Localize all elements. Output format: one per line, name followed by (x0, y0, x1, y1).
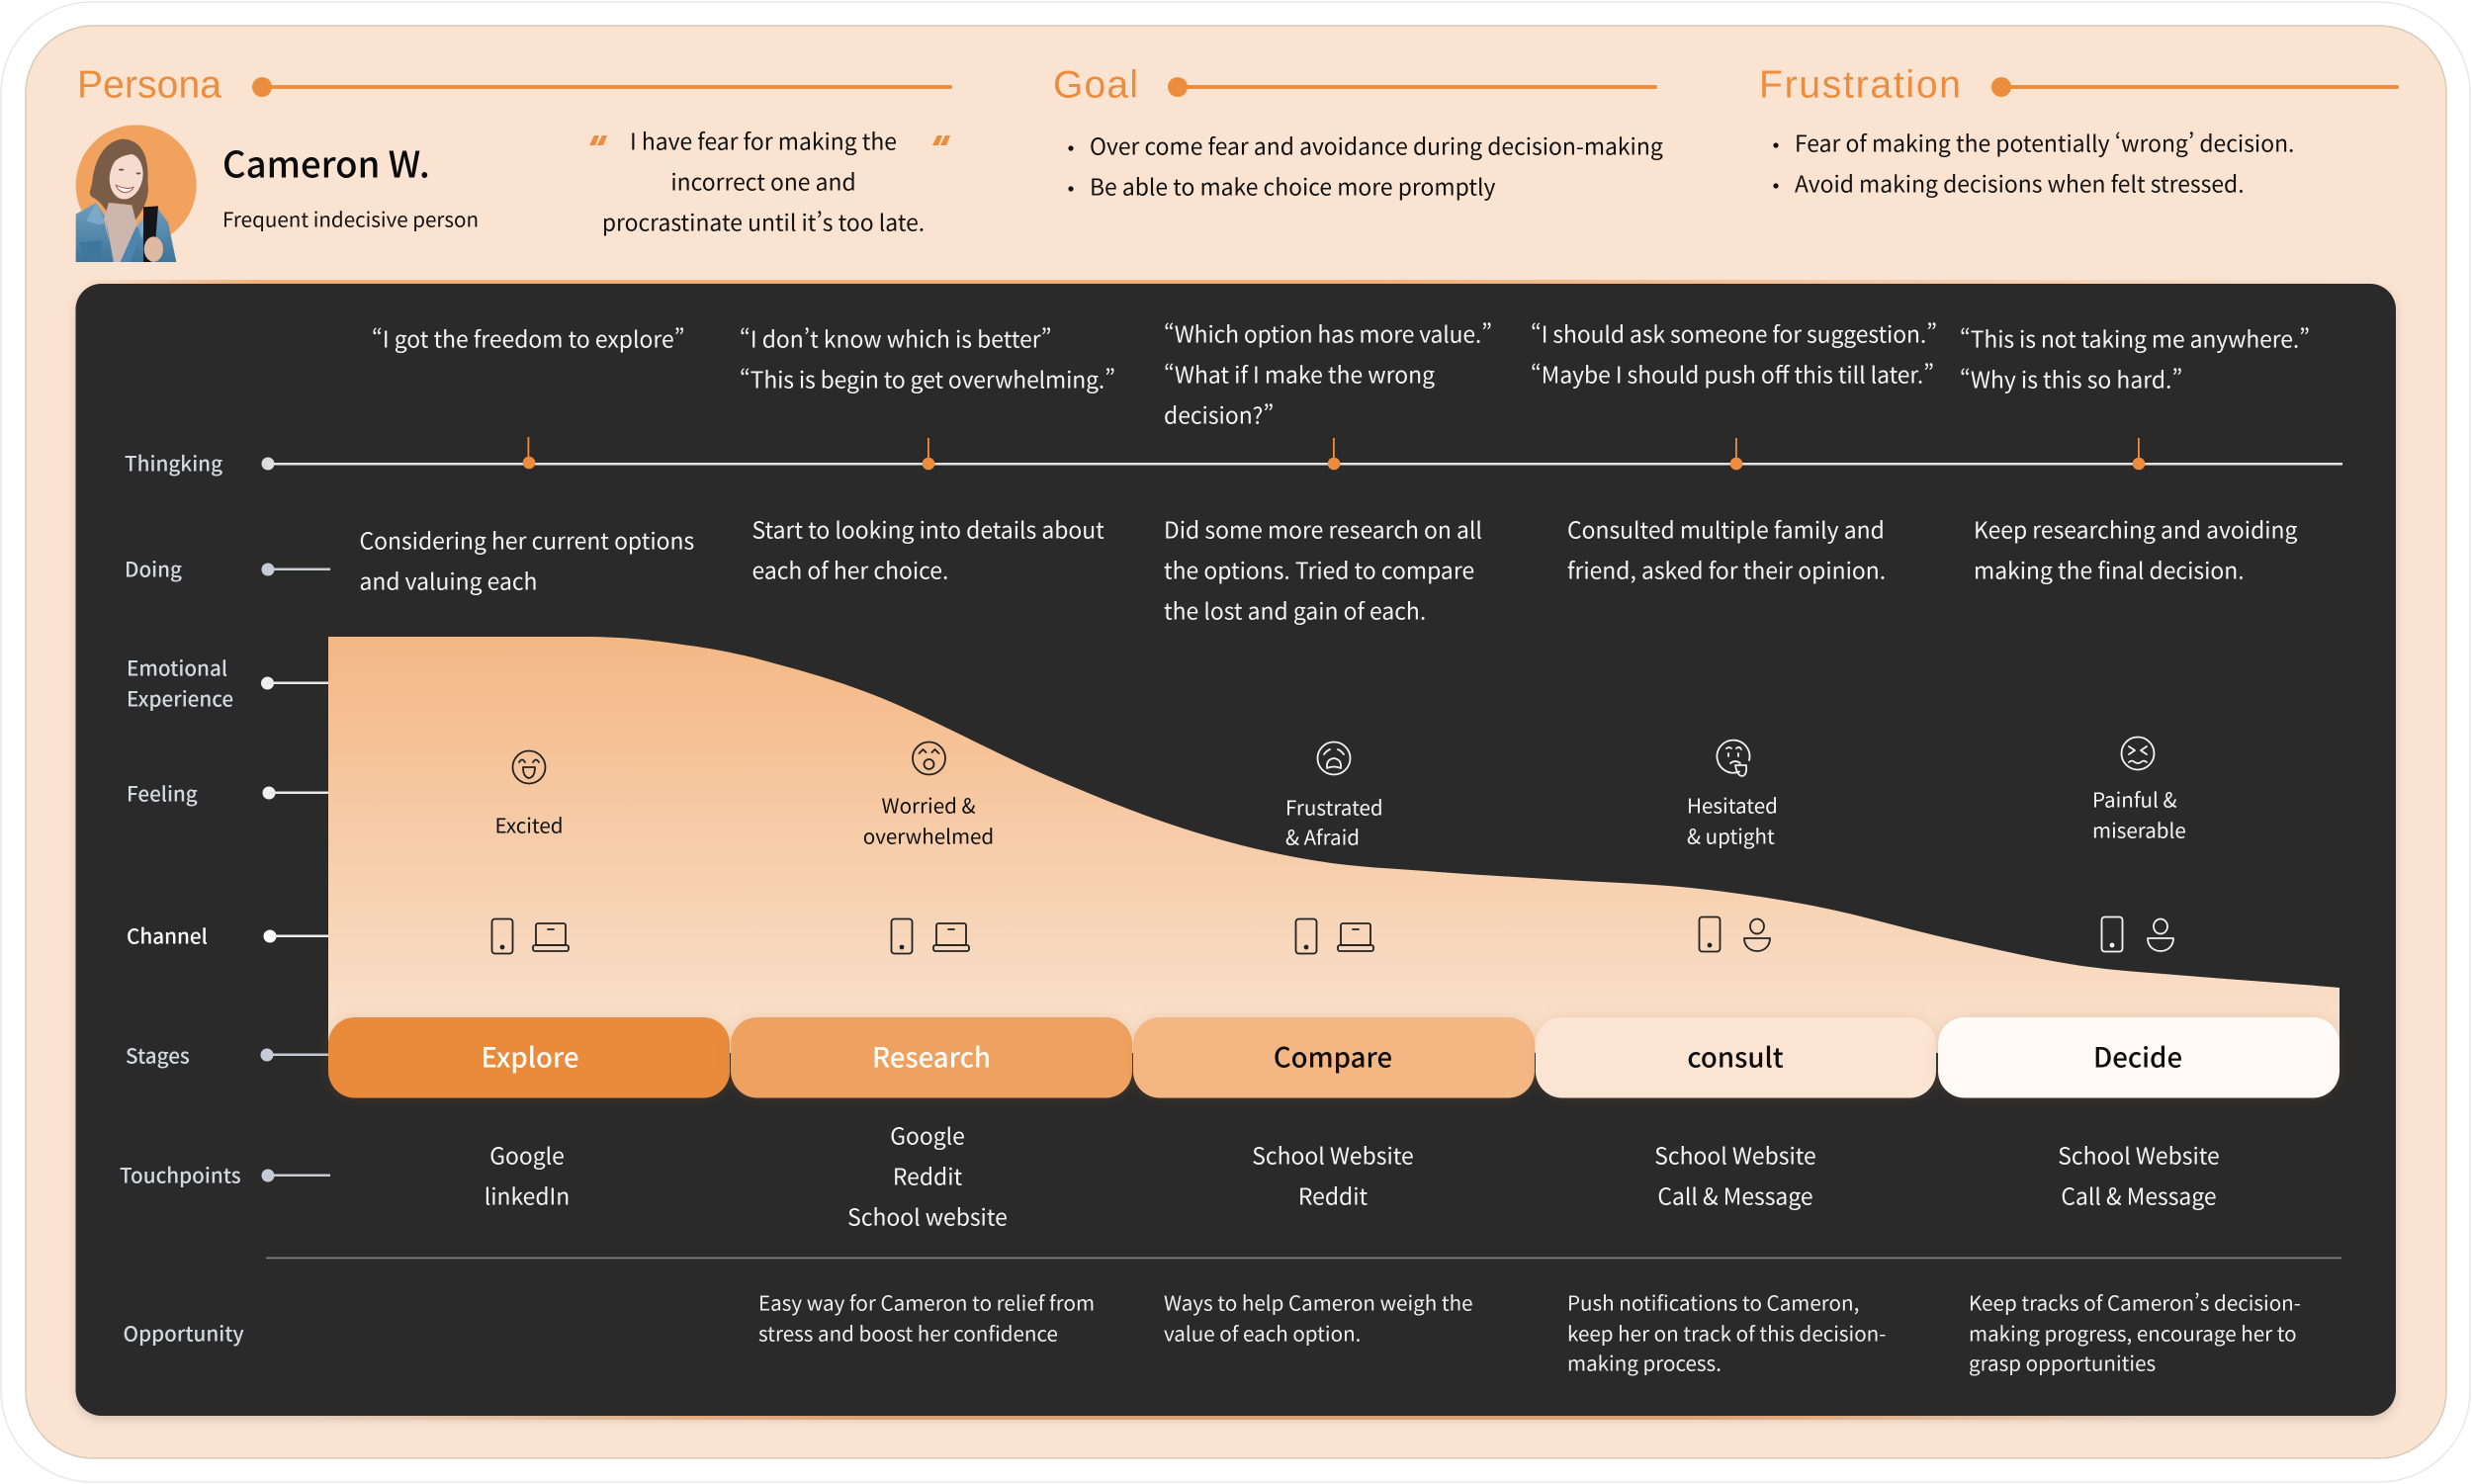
opportunity: stage 2: Easy way for Cameron to relief from (758, 1286, 1095, 1316)
doing: stage 3 (1164, 511, 1482, 626)
label: Channel (127, 919, 329, 949)
feeling: painful: Painful & (2092, 783, 2177, 813)
row labels (120, 447, 330, 1347)
icon: phone (1699, 917, 1721, 951)
heading: Goal: Goal (1053, 63, 1138, 106)
label: Touchpoints (120, 1159, 330, 1188)
opportunity: stage 2: stress and boost her confidence (758, 1317, 1058, 1347)
stage: Explore (328, 1017, 730, 1097)
touchpoints: stage 5 (2058, 1137, 2220, 1211)
quote: persona statement: procrastinate until it’s too late. (602, 204, 925, 237)
doing: stage 1: Considering her current options (360, 522, 694, 556)
doing: stage 4 (1567, 511, 1886, 585)
name: Cameron W.: Cameron W. (222, 135, 430, 188)
icon: opening quote mark (589, 135, 607, 145)
stages bar (328, 1017, 2340, 1097)
touchpoints: stage 4: School Website (1654, 1137, 1816, 1171)
emotional curve (328, 637, 2340, 1053)
opportunity: stage 4 (1567, 1286, 1886, 1376)
quote: stage 2 (740, 320, 1115, 394)
quote: stage 2: “I don’t know which is better” (740, 320, 1052, 354)
channel: stage 2 icons (892, 919, 969, 953)
goal list: Be able to make choice more promptly (1090, 168, 1496, 202)
feeling: frustrated: Frustrated (1285, 791, 1383, 821)
touchpoints: stage 5: School Website (2058, 1137, 2220, 1171)
feeling: frustrated: & Afraid (1285, 821, 1360, 850)
frustration list: Avoid making decisions when felt stressed. (1795, 165, 2245, 199)
label: Emotional Experience: Emotional (127, 652, 227, 681)
doing: stage 2 (751, 511, 1104, 585)
heading rule: Persona (252, 77, 952, 97)
label: Doing: Doing (125, 553, 182, 582)
doing: stage 1: and valuing each (360, 563, 537, 596)
feeling: hesitated: & uptight (1687, 820, 1775, 849)
feeling: painful (2092, 738, 2186, 843)
opportunity: stage 4: keep her on track of this decision- (1567, 1317, 1886, 1347)
label: Touchpoints: Touchpoints (120, 1159, 241, 1188)
quote: stage 4: “I should ask someone for suggestion.” (1531, 315, 1937, 349)
stage: Decide (1938, 1017, 2340, 1097)
stage: Decide: Decide (2093, 1035, 2182, 1075)
opportunity: stage 5 (1969, 1286, 2301, 1376)
quote: persona statement (589, 123, 950, 237)
touchpoints: stage 5: Call & Message (2061, 1178, 2217, 1211)
heading: Persona: Persona (77, 63, 221, 106)
icon: phone (892, 919, 912, 953)
feeling: excited (494, 751, 564, 838)
icon: closing quote mark (932, 135, 950, 145)
label: Thingking: Thingking (125, 447, 222, 477)
touchpoints: stage 2 (847, 1117, 1008, 1232)
doing: stage 5: Keep researching and avoiding (1974, 511, 2298, 545)
icon: person (2148, 919, 2173, 951)
quote: stage 3: “Which option has more value.” (1164, 315, 1492, 349)
label: Feeling (127, 777, 329, 807)
touchpoints: stage 3: School Website (1252, 1137, 1414, 1171)
opportunity: stage 5: Keep tracks of Cameron’s decision- (1969, 1286, 2301, 1316)
frustration list (1773, 125, 2294, 199)
opportunity: stage 4: Push notifications to Cameron, (1567, 1286, 1859, 1316)
touchpoints: stage 2: School website (847, 1198, 1008, 1232)
icon: laptop (533, 923, 569, 951)
icon: phone (2102, 917, 2122, 951)
icon: laptop (1338, 923, 1373, 951)
feeling: excited: Excited (494, 809, 564, 838)
label: Opportunity: Opportunity (123, 1317, 244, 1347)
stage: Compare: Compare (1274, 1035, 1392, 1075)
quote: persona statement: I have fear for making the (630, 123, 897, 156)
touchpoints: stage 3 (1252, 1137, 1414, 1211)
touchpoints: stage 1: linkedIn (485, 1178, 570, 1211)
heading rule: Goal (1168, 77, 1657, 97)
opportunity: stage 5: grasp opportunities (1969, 1347, 2156, 1376)
touchpoints: stage 2: Reddit (893, 1158, 963, 1191)
icon: painful face (2122, 738, 2154, 769)
panel: persona (76, 63, 952, 262)
quote: stage 5: “This is not taking me anywhere.” (1960, 320, 2310, 354)
label: Stages (126, 1039, 329, 1069)
panel: frustration (1759, 63, 2399, 199)
channel: stage 4 icons (1699, 917, 1770, 951)
feeling: hesitated: Hesitated (1687, 789, 1778, 819)
label: Channel: Channel (127, 919, 208, 949)
doing: stage 5: making the final decision. (1974, 552, 2245, 585)
touchpoints: stage 3: Reddit (1298, 1178, 1368, 1211)
doing: stage 2: each of her choice. (751, 552, 948, 585)
stage: consult (1536, 1017, 1936, 1097)
doing: stage 1 (360, 522, 694, 596)
opportunity: stage 3 (1164, 1286, 1473, 1347)
goal list (1068, 128, 1663, 202)
label: Thingking (125, 447, 275, 477)
quote: stage 3 (1164, 315, 1492, 430)
label: Stages: Stages (126, 1039, 190, 1069)
touchpoints: stage 2: Google (890, 1117, 965, 1151)
doing: stage 4: friend, asked for their opinion. (1567, 552, 1886, 585)
icon: excited face (512, 751, 546, 783)
quote: stage 3: decision?” (1164, 396, 1274, 430)
stage: Research (731, 1017, 1132, 1097)
icon: hesitated face (1717, 741, 1749, 776)
feeling: worried: Worried & (882, 789, 975, 819)
opportunity: stage 5: making progress, encourage her to (1969, 1317, 2297, 1347)
heading: Frustration: Frustration (1759, 63, 1961, 106)
quote: stage 3: “What if I make the wrong (1164, 356, 1435, 390)
doing: stage 3: Did some more research on all (1164, 511, 1482, 545)
touchpoints: stage 4 (1654, 1137, 1816, 1211)
label: Emotional Experience: Experience (127, 682, 233, 712)
doing descriptions (360, 511, 2298, 626)
quote: stage 1: “I got the freedom to explore” (372, 320, 685, 354)
icon: person (1744, 919, 1770, 951)
opportunity: stage 2 (758, 1286, 1095, 1347)
channel: stage 5 icons (2102, 917, 2173, 951)
icon: phone (1295, 919, 1317, 953)
icon: phone (492, 919, 512, 953)
touchpoints: stage 1 (485, 1137, 570, 1211)
icon: worried face (913, 742, 945, 775)
quote: stage 5 (1960, 320, 2310, 394)
opportunity: stage 3: Ways to help Cameron weigh the (1164, 1286, 1473, 1316)
panel: journey map (75, 284, 2396, 1416)
stage: consult: consult (1687, 1035, 1784, 1075)
doing: stage 5 (1974, 511, 2298, 585)
doing: stage 4: Consulted multiple family and (1567, 511, 1885, 545)
quote: stage 5: “Why is this so hard.” (1960, 361, 2182, 394)
panel: goal (1053, 63, 1663, 202)
touchpoints: stage 4: Call & Message (1657, 1178, 1813, 1211)
feeling: worried (863, 742, 994, 849)
quote: stage 4 (1531, 315, 1937, 390)
touchpoints: stage 1: Google (489, 1137, 565, 1171)
opportunity: stage 4: making process. (1567, 1347, 1722, 1376)
channel: stage 3 icons (1295, 919, 1373, 953)
opportunities (758, 1286, 2301, 1376)
feeling: hesitated (1687, 741, 1778, 849)
feeling: frustrated (1285, 742, 1383, 850)
label: Doing (125, 553, 330, 582)
feeling: painful: miserable (2092, 814, 2186, 843)
icon: laptop (933, 923, 969, 951)
frustration list: Fear of making the potentially ‘wrong’ decision. (1795, 125, 2294, 158)
stage: Explore: Explore (481, 1035, 579, 1075)
doing: stage 3: the lost and gain of each. (1164, 592, 1426, 626)
touchpoints (485, 1117, 2220, 1232)
thinking timeline (268, 437, 2342, 470)
label: Emotional Experience (127, 652, 329, 712)
quote: persona statement: incorrect one and (670, 163, 856, 197)
doing: stage 3: the options. Tried to compare (1164, 552, 1474, 585)
opportunity: stage 3: value of each option. (1164, 1317, 1361, 1347)
stage: Compare (1133, 1017, 1535, 1097)
stage: Research: Research (872, 1035, 991, 1075)
icon: frustrated face (1317, 742, 1351, 775)
quote: stage 2: “This is begin to get overwhelming.” (740, 361, 1115, 394)
label: Feeling: Feeling (127, 777, 198, 807)
quote: stage 4: “Maybe I should push off this till later.” (1531, 356, 1934, 390)
role: frequent indecisive person: Frequent indecisive person (222, 203, 479, 232)
avatar: Cameron portrait (76, 125, 197, 262)
channel: stage 1 icons (492, 919, 569, 953)
heading rule: Frustration (1991, 77, 2399, 97)
thinking quotes (372, 315, 2310, 430)
doing: stage 2: Start to looking into details about (751, 511, 1104, 545)
feeling: worried: overwhelmed (863, 820, 994, 849)
goal list: Over come fear and avoidance during decision-making (1090, 128, 1663, 161)
